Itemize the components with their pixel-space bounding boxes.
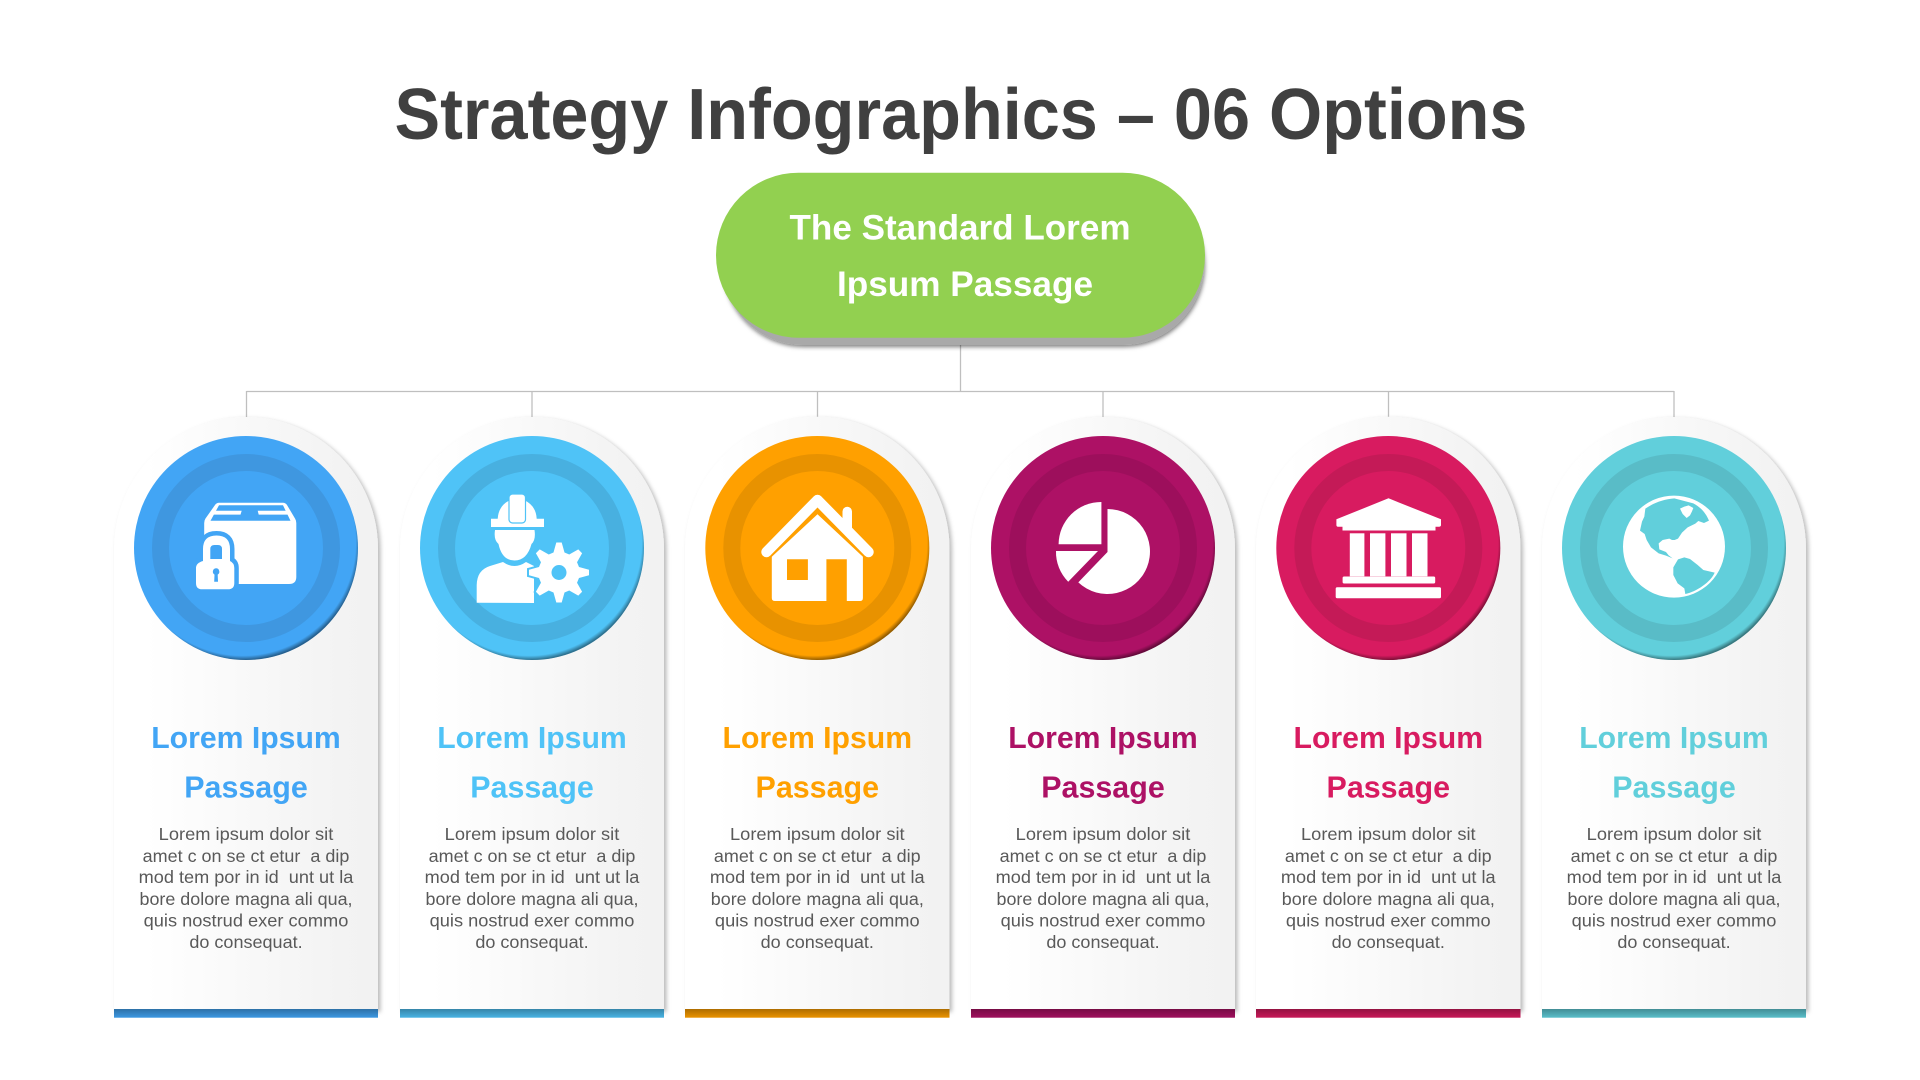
heading: Passage	[470, 770, 594, 805]
body text: Lorem ipsum dolor sit	[445, 824, 619, 844]
body text: mod tem por in id unt ut la	[996, 867, 1211, 887]
card bottom bar	[400, 1009, 664, 1018]
heading: Lorem Ipsum	[723, 720, 912, 755]
pill text: The Standard Lorem	[790, 208, 1130, 247]
icon: box with lock	[196, 503, 296, 589]
body text: amet c on se ct etur a dip	[429, 846, 635, 866]
body text	[425, 824, 640, 952]
body text: Lorem ipsum dolor sit	[730, 824, 905, 844]
body text: quis nostrud exer commo	[430, 911, 634, 931]
panel: option 1	[114, 417, 378, 1018]
body text: do consequat.	[475, 932, 589, 952]
body text: mod tem por in id unt ut la	[425, 867, 640, 887]
body text: mod tem por in id unt ut la	[139, 867, 354, 887]
body text: quis nostrud exer commo	[1286, 911, 1491, 931]
body text: do consequat.	[761, 932, 874, 952]
body text: bore dolore magna ali qua,	[996, 889, 1210, 909]
pill body	[716, 173, 1205, 338]
body text: do consequat.	[1617, 932, 1731, 952]
body text: do consequat.	[189, 932, 303, 952]
card background	[400, 417, 664, 1010]
circle badge	[705, 436, 929, 660]
card bottom bar	[1542, 1009, 1806, 1018]
card bottom bar	[114, 1009, 378, 1018]
icon: temple	[1336, 498, 1441, 598]
panel: option 5	[1256, 417, 1520, 1018]
heading: Passage	[1041, 770, 1165, 805]
heading	[437, 720, 627, 805]
heading: Lorem Ipsum	[1008, 720, 1198, 755]
body text: mod tem por in id unt ut la	[1567, 867, 1782, 887]
body text: quis nostrud exer commo	[1001, 911, 1205, 931]
connector lines	[246, 338, 1674, 418]
heading: Passage	[1612, 770, 1736, 805]
icon: house	[766, 500, 868, 601]
body text: amet c on se ct etur a dip	[1285, 846, 1492, 866]
heading: Passage	[756, 770, 879, 805]
circle badge	[1276, 436, 1500, 660]
body text: amet c on se ct etur a dip	[143, 846, 349, 866]
card background	[1256, 417, 1520, 1010]
central pill: Ipsum Passage	[837, 265, 1093, 304]
heading	[1579, 720, 1769, 805]
body text: quis nostrud exer commo	[715, 911, 920, 931]
panel: option 3	[685, 417, 950, 1018]
central pill	[716, 173, 1205, 345]
heading: Lorem Ipsum	[1294, 720, 1483, 755]
card background	[1542, 417, 1806, 1010]
body text: amet c on se ct etur a dip	[714, 846, 921, 866]
body text	[1281, 824, 1496, 952]
icon: worker with gear	[477, 494, 589, 607]
heading: Lorem Ipsum	[437, 720, 627, 755]
icon: pie chart	[1056, 502, 1150, 594]
heading	[1294, 720, 1483, 805]
panel: option 2	[400, 417, 664, 1018]
body text	[139, 824, 354, 952]
body text: bore dolore magna ali qua,	[1282, 889, 1495, 909]
body text: bore dolore magna ali qua,	[711, 889, 924, 909]
heading	[151, 720, 341, 805]
heading	[1008, 720, 1198, 805]
body text: bore dolore magna ali qua,	[1568, 889, 1780, 909]
circle badge	[134, 436, 358, 660]
pill shadow	[722, 183, 1204, 345]
body text: do consequat.	[1046, 932, 1160, 952]
body text: Lorem ipsum dolor sit	[1016, 824, 1190, 844]
card background	[114, 417, 378, 1010]
body text: mod tem por in id unt ut la	[710, 867, 925, 887]
circle badge	[1562, 436, 1786, 660]
body text	[710, 824, 925, 952]
card bottom bar	[1256, 1009, 1520, 1018]
heading: Lorem Ipsum	[1579, 720, 1769, 755]
body text: Lorem ipsum dolor sit	[1587, 824, 1761, 844]
circle badge	[420, 436, 644, 660]
heading	[723, 720, 912, 805]
body text: quis nostrud exer commo	[1572, 911, 1776, 931]
body text: bore dolore magna ali qua,	[140, 889, 352, 909]
body text: quis nostrud exer commo	[144, 911, 348, 931]
body text: Lorem ipsum dolor sit	[1301, 824, 1476, 844]
body text	[1567, 824, 1782, 952]
card background	[685, 417, 950, 1010]
icon: globe	[1623, 496, 1725, 598]
body text: Lorem ipsum dolor sit	[159, 824, 333, 844]
body text: bore dolore magna ali qua,	[426, 889, 638, 909]
body text: amet c on se ct etur a dip	[1571, 846, 1777, 866]
heading: Passage	[184, 770, 308, 805]
circle badge	[991, 436, 1215, 660]
card bottom bar	[685, 1009, 950, 1018]
body text: do consequat.	[1332, 932, 1445, 952]
card bottom bar	[971, 1009, 1235, 1018]
heading: Passage	[1327, 770, 1450, 805]
body text: mod tem por in id unt ut la	[1281, 867, 1496, 887]
body text: amet c on se ct etur a dip	[1000, 846, 1206, 866]
card background	[971, 417, 1235, 1010]
body text	[996, 824, 1211, 952]
panel: option 4	[971, 417, 1235, 1018]
title: Strategy Infographics – 06 Options	[394, 75, 1528, 155]
panel: option 6	[1542, 417, 1806, 1018]
heading: Lorem Ipsum	[151, 720, 341, 755]
